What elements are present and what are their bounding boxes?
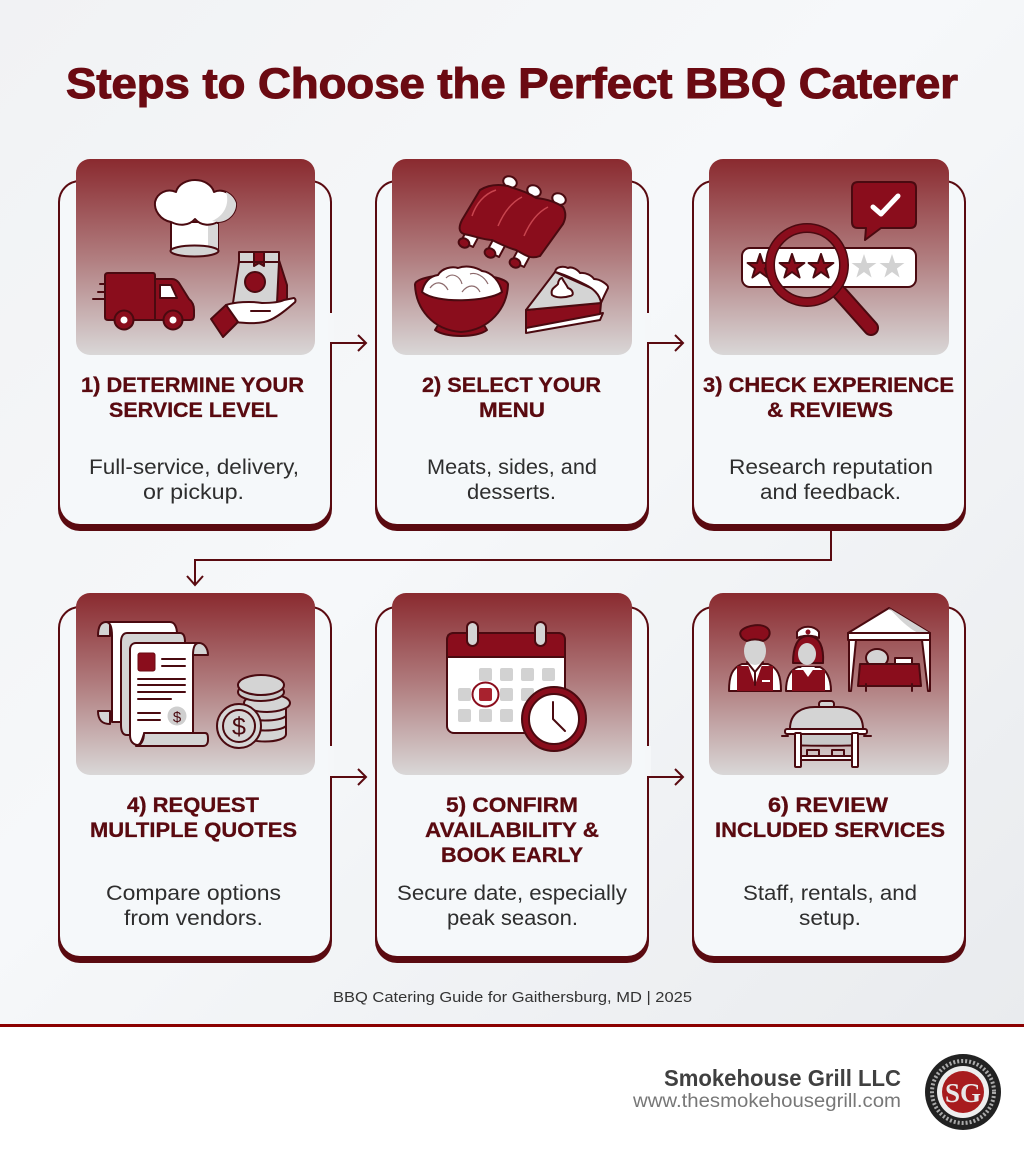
heading: step 5: BOOK EARLY (441, 844, 583, 867)
heading: step 2: 2) SELECT YOUR (422, 374, 601, 397)
text: step 1: or pickup. (143, 481, 244, 504)
icon: delivery truck (93, 273, 194, 330)
icon: speech bubble with check (852, 182, 916, 240)
footer rule (0, 1024, 1024, 1027)
text: step 6: setup. (799, 907, 861, 930)
text: step 1 (89, 456, 299, 504)
image panel: step 4 (76, 593, 315, 775)
heading: step 2 (422, 374, 601, 422)
heading: step 4: MULTIPLE QUOTES (90, 819, 297, 842)
heading: step 3: & REVIEWS (767, 399, 893, 422)
icon: clock (522, 687, 586, 751)
footer company name: Smokehouse Grill LLC (664, 1065, 901, 1091)
text: step 5: Secure date, especially (397, 882, 628, 905)
panel: step 1 (58, 159, 334, 531)
icon: magnifying glass (770, 228, 871, 328)
text: step 2: desserts. (467, 481, 556, 504)
footer band (0, 1024, 1024, 1154)
heading: step 1: 1) DETERMINE YOUR (81, 374, 304, 397)
arrow: step 2 to step 3 (648, 335, 683, 351)
heading: step 5 (425, 794, 599, 867)
panel: step 5 (375, 593, 651, 963)
icon: ribs (457, 174, 568, 269)
icon: chef hat (155, 180, 236, 256)
icon: coin stack (217, 675, 290, 748)
heading: step 4: 4) REQUEST (127, 794, 259, 817)
image panel: step 6 (709, 593, 949, 775)
heading: step 6 (715, 794, 945, 842)
heading: step 5: AVAILABILITY & (425, 819, 599, 842)
image panel: step 1 (76, 159, 315, 355)
text: step 3: and feedback. (760, 481, 901, 504)
text: step 2: Meats, sides, and (427, 456, 597, 479)
icon: event tent (848, 608, 930, 691)
arrow: step 4 to step 5 (331, 769, 366, 785)
connector: step 3 to step 4 (187, 531, 831, 585)
icon: rating bar with stars (742, 248, 916, 287)
text: step 3: Research reputation (729, 456, 933, 479)
heading: step 1 (81, 374, 304, 422)
arrow: step 5 to step 6 (648, 769, 683, 785)
heading: step 6: 6) REVIEW (768, 794, 888, 817)
icon: male staff (729, 625, 781, 691)
icon: coin stack: $ (232, 713, 246, 741)
text: step 4: from vendors. (124, 907, 263, 930)
heading: step 6: INCLUDED SERVICES (715, 819, 945, 842)
icon: quote documents: $ (173, 709, 182, 726)
text: step 2 (427, 456, 597, 504)
text: step 6 (743, 882, 917, 930)
caption: BBQ Catering Guide for Gaithersburg, MD | 2025 (333, 990, 692, 1006)
text: step 5: peak season. (447, 907, 578, 930)
heading: step 3 (703, 374, 954, 422)
arrow: step 1 to step 2 (331, 335, 366, 351)
panel: step 6 (692, 593, 966, 963)
icon: female staff (786, 627, 831, 691)
panel: step 4 (58, 593, 334, 963)
text: step 3 (729, 456, 933, 504)
heading: step 2: MENU (479, 399, 545, 422)
image panel: step 3 (709, 159, 949, 355)
text: step 6: Staff, rentals, and (743, 882, 917, 905)
panel: step 2 (375, 159, 651, 531)
text: step 5 (397, 882, 628, 930)
heading: step 5: 5) CONFIRM (446, 794, 578, 817)
text: step 4: Compare options (106, 882, 281, 905)
icon: calendar (447, 622, 565, 733)
heading: step 4 (90, 794, 297, 842)
title: Steps to Choose the Perfect BBQ Caterer (66, 60, 958, 108)
text: step 4 (106, 882, 281, 930)
icon: chafing dish (782, 701, 871, 767)
panel: step 3 (692, 159, 966, 531)
icon: bowl of mac and cheese (415, 267, 508, 336)
logo: SG (945, 1078, 981, 1108)
text: step 1: Full-service, delivery, (89, 456, 299, 479)
heading: step 1: SERVICE LEVEL (109, 399, 278, 422)
footer website: www.thesmokehousegrill.com (632, 1090, 901, 1112)
heading: step 3: 3) CHECK EXPERIENCE (703, 374, 954, 397)
icon: pie slice (526, 267, 608, 333)
image panel: step 2 (392, 159, 632, 355)
logo (925, 1054, 1001, 1130)
icon: takeout bag on hand (211, 252, 296, 337)
image panel: step 5 (392, 593, 632, 775)
icon: quote documents (98, 622, 208, 746)
